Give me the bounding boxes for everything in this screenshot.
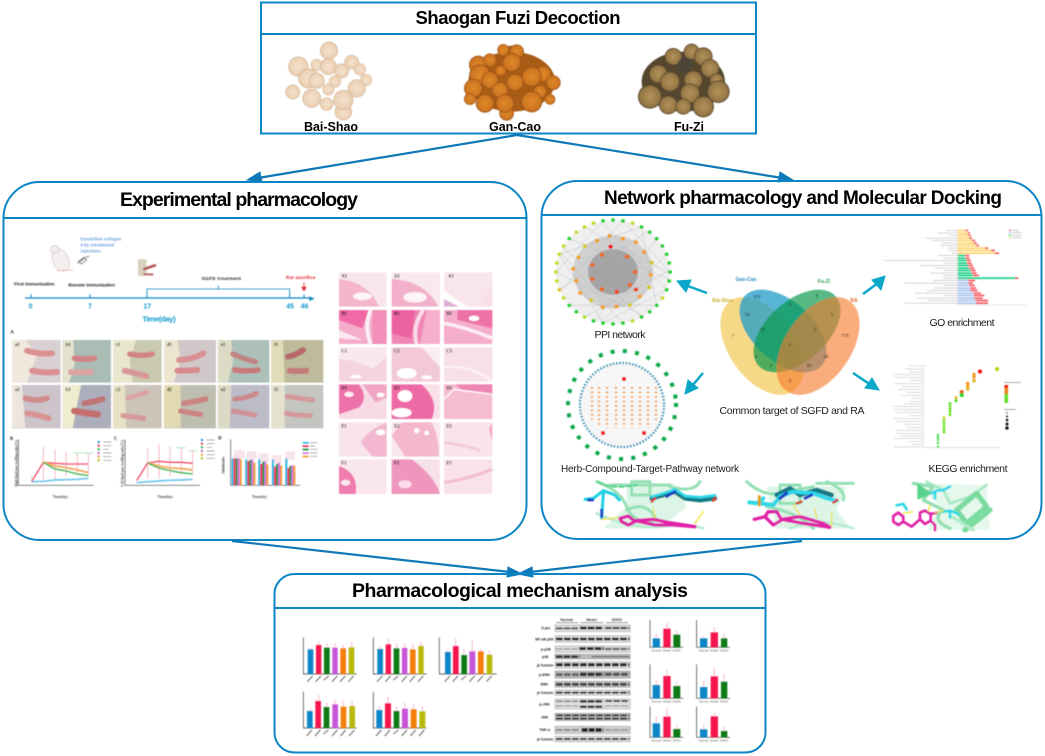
photo: e2 [218,385,269,428]
arrow: to herb network [685,373,703,394]
text: timeline labels: 7 [88,303,92,310]
tile: B3: B3 [446,312,452,317]
text: timeline labels: SGFD treatment [202,276,241,281]
tile: B1: B1 [341,312,347,317]
chart: Venn diagram of common targets: 7 [732,333,735,338]
bars [958,230,995,254]
group labels: Model [710,648,719,652]
photo: b2: b2 [66,388,71,393]
group labels: Model [663,738,671,742]
tile: E1: E1 [341,424,347,429]
chart E [697,664,730,698]
group labels: Normal [699,648,709,652]
blot labels: ERK [541,682,549,686]
molecular docking images [585,482,990,530]
chart: herb-compound-target-pathway network [566,349,678,461]
blot labels: p-ERK [539,673,550,677]
bar chart: arthritis index: Arthritis index [222,456,226,474]
photo: a2: a2 [15,388,20,393]
tile: B2: B2 [394,312,400,317]
text: timeline labels: 0 [29,303,33,310]
blot labels: β-Tubulin [537,691,553,695]
chart: Venn diagram of common targets: 8 [789,302,792,307]
text: timeline labels: Rat sacrifice [286,275,316,280]
tile: D3 [444,384,492,419]
tile: C2 [392,347,440,382]
arrow: sacrifice [302,283,306,291]
text: timeline labels: First immunization [14,282,55,287]
tile: F2: F2 [394,461,400,466]
tile: C1 [339,347,387,382]
group labels [652,648,729,742]
photo: b1: b1 [66,343,71,348]
tile: A1: A1 [341,274,348,279]
line chart: left hind paw swelling: Time(day) [157,495,173,499]
group labels: Normal [699,738,709,742]
tile: A2 [392,272,440,307]
chart: Venn diagram of common targets: Gan-Cao [736,277,756,283]
panel: Network pharmacology and Molecular Docking [540,181,1042,539]
chart: Venn diagram of common targets: 5 [816,293,819,298]
tile: B3 [444,310,492,344]
tile: A2: A2 [394,274,400,279]
blot rows [555,625,630,742]
blot group headers: SGFD [612,618,622,622]
tile: E1 [339,422,387,457]
text: timeline labels [14,275,316,324]
chart C [697,620,730,647]
dot plot: KEGG enrichment [892,364,1021,448]
legend [201,439,215,459]
line chart: right hind paw swelling [10,437,111,499]
histology image grid [339,272,492,494]
bar chart: GO enrichment [884,229,1027,305]
tile: C3 [444,347,492,382]
chart: PPI network [540,202,693,344]
docking view 1 [585,482,715,528]
blot labels: β-Tubulin [537,663,553,667]
line chart: left hind paw swelling: Left hind paw swelling ratio (%) [120,439,124,487]
tile: F3 [444,459,492,494]
group labels: Model [710,738,719,742]
photo: c2 [113,385,162,428]
tile: D1: D1 [341,386,348,391]
blot group headers: Normal [560,618,573,622]
photo: f2: f2 [274,388,279,393]
group labels: Normal [652,738,661,742]
group labels: Model [710,699,719,703]
group labels: Model [663,699,671,703]
title: Shaogan Fuzi Decoction: Shaogan Fuzi Decoction [416,7,620,28]
photo: f2 [271,385,323,428]
line chart: right hind paw swelling: Time(day) [53,495,69,499]
category labels [884,230,957,304]
label: Fu-Zi: Fu-Zi [674,120,704,134]
bar charts: protein expression [650,620,730,742]
label: Common target of SGFD and RA: Common target of SGFD and RA [720,405,864,417]
blot labels: p38 [542,655,548,659]
chart: Venn diagram of common targets: 778 [841,333,849,338]
chart: Venn diagram of common targets: Fu-Zi [818,279,831,285]
chart: Venn diagram of common targets [703,274,877,410]
tile: D2 [392,384,440,419]
chart: Venn diagram of common targets: 4 [770,363,773,368]
chart: Venn diagram of common targets: Bai-Shao [712,298,734,304]
group labels: Normal [652,699,661,703]
tile: B2 [392,310,440,344]
heading: Experimental pharmacology: Experimental pharmacology [120,189,358,211]
icon: rat [48,246,73,274]
label: PPI network: PPI network [594,329,646,341]
line chart: right hind paw swelling: Right hind paw swelling ratio (%) [14,439,18,487]
photo: c2: c2 [116,388,121,393]
group labels: Normal [699,699,709,703]
chart: Venn diagram of common targets: 36 [823,354,829,359]
label: Gan-Cao: Gan-Cao [489,120,541,134]
chart: Venn diagram of common targets: RA [850,298,858,304]
panel: Pharmacological mechanism analysis [274,574,766,752]
legend [1004,385,1008,394]
chart D [650,664,683,698]
bar charts: inflammatory factors [303,637,497,736]
icon: rat paw [138,259,156,276]
tile: F1 [339,459,387,494]
arrow: to PPI network [677,280,707,293]
text: timeline labels: Time(day) [142,315,176,324]
chart: Venn diagram of common targets: 6 [789,342,792,347]
tile: F3: F3 [446,461,452,466]
blot labels: TLR4 [541,626,551,630]
photo: a2 [12,385,61,428]
bar chart: arthritis index: Time(day) [252,495,268,499]
chart: Venn diagram of common targets: 47 [760,327,766,332]
photo grid: rat hind paws: A [10,329,14,335]
icon: syringe [77,256,89,264]
legend [303,442,309,444]
chart: Venn diagram of common targets: 30 [806,363,812,368]
group labels: Normal [652,648,661,652]
arrow: network to mechanism [518,541,802,577]
group labels: SGFD [720,648,729,652]
group labels: SGFD [720,699,729,703]
tile: D3: D3 [446,386,453,391]
line chart: left hind paw swelling [114,437,215,499]
photo: c1: c1 [116,343,121,348]
docking view 2 [747,482,853,528]
arrow: to GO enrichment [863,276,885,294]
dots [925,365,927,367]
heading: Pharmacological mechanism analysis: Pharmacological mechanism analysis [352,580,688,602]
photo: a1: a1 [15,343,20,348]
arrow: to KEGG enrichment [853,373,879,390]
text: timeline labels: 45 [286,303,294,310]
blot bands [556,628,629,739]
group labels: SGFD [673,648,682,652]
label: GO enrichment: GO enrichment [930,317,995,329]
text: injection note: Emulsified collagen [81,236,122,241]
chart: Venn diagram of common targets: 1 [831,312,834,317]
photo: d1: d1 [167,343,173,348]
chart B [373,637,427,682]
blot group headers [560,618,622,622]
photo: e2: e2 [221,388,226,393]
docking view 3 [893,482,990,530]
photo: d1 [164,340,216,383]
panel: Shaogan Fuzi Decoction [261,2,756,134]
tile: A1 [339,272,387,307]
arrow: to experimental pharmacology [247,135,517,182]
icon: Fu-Zi herb [638,44,730,117]
arrow: experimental to mechanism [232,541,522,577]
icon: Gan-Cao herb [464,44,561,121]
blot labels [535,626,553,741]
text: timeline labels: 46 [301,303,309,310]
label: KEGG enrichment: KEGG enrichment [928,463,1008,475]
photo: c1 [113,340,162,383]
tile: D1 [339,384,387,419]
tile: C3: C3 [446,349,453,354]
bar chart: arthritis index [218,436,317,499]
timeline diagram [14,236,316,324]
photo grid: rat hind paws [10,329,323,428]
heading: Network pharmacology and Molecular Docking: Network pharmacology and Molecular Docking [604,188,1002,209]
tile: E2 [392,422,440,457]
tile: C1: C1 [341,349,348,354]
photo: f1 [271,340,323,383]
bar chart: arthritis index: D [218,436,222,441]
label: Bai-Shao: Bai-Shao [304,120,358,134]
tile: E2: E2 [394,424,400,429]
pathway labels [892,366,922,447]
tile: A3: A3 [448,274,454,279]
text: timeline labels: Booster immunization [68,283,115,288]
tile: D2: D2 [394,386,400,391]
photo: b1 [63,340,111,383]
text: injection note: injections [81,248,101,253]
chart: Venn diagram of common targets: 2 [814,327,817,332]
axis: time line [25,286,315,301]
text: injection note: II by intradermal [81,242,114,247]
panel: Experimental pharmacology [4,182,526,540]
legend [1009,230,1021,238]
chart A [303,637,357,682]
chart B [650,620,683,647]
tile: F1: F1 [341,461,347,466]
legend [97,441,111,461]
photo: d2: d2 [167,388,173,393]
text: injection note [81,236,122,253]
group labels: SGFD [673,699,682,703]
chart D [303,692,357,736]
line chart: left hind paw swelling: C [114,437,118,442]
blot labels: NF-κB p65 [535,637,553,641]
blot labels: JNK [541,715,549,719]
chart: Venn diagram of common targets: 75 [744,312,750,317]
blot labels: TNF-α [539,728,551,732]
blot group headers: Model [586,618,597,622]
photo: b2 [63,385,111,428]
blot labels: β-Tubulin [537,737,553,741]
chart F [650,707,683,737]
tile: F2 [392,459,440,494]
chart: Venn diagram of common targets: 3 [789,378,792,383]
western blot panel [535,618,630,742]
photo: d2 [164,385,216,428]
label: Herb-Compound-Target-Pathway network: Herb-Compound-Target-Pathway network [561,464,740,475]
blot labels: p-p38 [541,647,551,651]
tile: E3: E3 [446,424,452,429]
tile: B1 [339,310,387,344]
photo: f1: f1 [274,343,279,348]
tile: C2: C2 [394,349,400,354]
tile: E3 [444,422,492,457]
chart: Venn diagram of common targets: 102 [753,294,761,299]
photo: e1 [218,340,269,383]
chart C [439,637,497,682]
chart G [697,707,730,737]
group labels: SGFD [673,738,682,742]
tile: A3 [444,272,492,307]
photo: e1: e1 [221,343,226,348]
text: timeline labels: 17 [143,303,151,310]
chart: Venn diagram of common targets: 4 [755,354,758,359]
photo: a1 [12,340,61,383]
group labels: Model [663,648,671,652]
line chart: right hind paw swelling: B [10,437,13,442]
arrow: to network pharmacology [517,135,793,182]
chart E [373,692,427,736]
icon: Bai-Shao herb [285,42,372,120]
group labels: SGFD [720,738,729,742]
blot labels: p-JNK [539,702,550,706]
